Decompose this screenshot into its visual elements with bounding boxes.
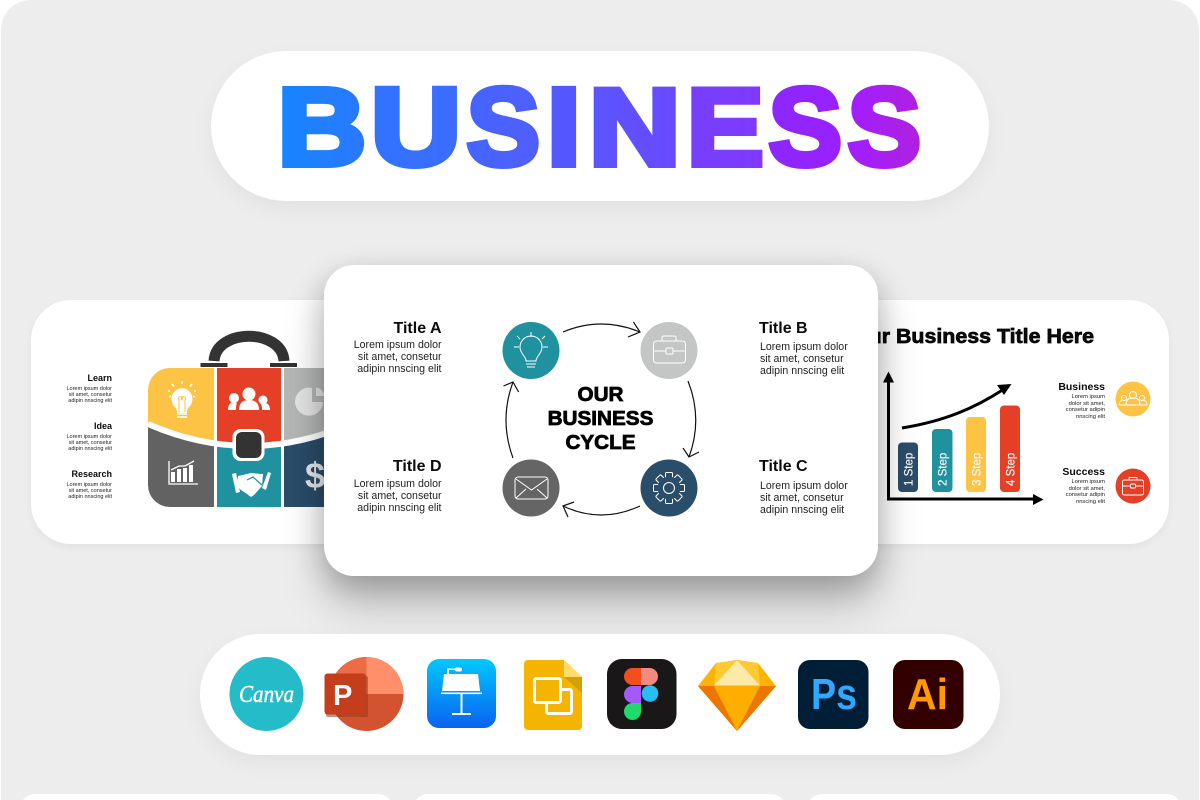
text: Success: dolor sit amet, bbox=[1069, 486, 1105, 492]
bottom row: partially visible cards bbox=[23, 794, 1179, 800]
text: Success bbox=[1062, 466, 1105, 505]
text: Title B: Title B bbox=[759, 320, 808, 337]
text: Success: nnscing elit bbox=[1076, 499, 1105, 505]
icon: lightbulb bbox=[502, 322, 560, 379]
briefcase body bbox=[148, 368, 324, 507]
text: Title D bbox=[354, 458, 442, 514]
panel: briefcase slide bbox=[31, 300, 324, 545]
text: Business: consetur adipin bbox=[1066, 407, 1105, 413]
text: Title C: Title C bbox=[759, 458, 808, 475]
heading: BUSINESS: E bbox=[687, 66, 764, 188]
text: Title B: Lorem ipsum dolor bbox=[760, 341, 848, 353]
panel: growth chart slide bbox=[769, 300, 1169, 544]
center heading: CYCLE bbox=[565, 431, 636, 454]
arrow: right bbox=[683, 381, 699, 457]
bar: 1 Step bbox=[898, 442, 918, 492]
text: Success: Success bbox=[1062, 466, 1105, 478]
text: Success: Lorem ipsum bbox=[1071, 479, 1105, 485]
icon: dollar: $ bbox=[305, 455, 325, 496]
text: Learn bbox=[66, 373, 112, 404]
text: Idea: adipin nnscing elit bbox=[68, 446, 112, 452]
heading: BUSINESS: S bbox=[769, 66, 842, 189]
icon: Illustrator bbox=[893, 660, 964, 729]
icon: gear bbox=[640, 460, 698, 516]
icon: pie chart bbox=[295, 387, 325, 416]
bar: 1 Step: 1 Step bbox=[904, 453, 916, 486]
heading: BUSINESS: S bbox=[467, 66, 540, 189]
text: Title A: adipin nnscing elit bbox=[357, 363, 442, 375]
icon: Photoshop bbox=[798, 660, 868, 729]
text: Business: nnscing elit bbox=[1076, 414, 1105, 420]
text: Title D: adipin nnscing elit bbox=[357, 502, 442, 514]
icon: PowerPoint: P bbox=[333, 680, 352, 712]
text: Title A bbox=[354, 320, 442, 375]
icon: Keynote bbox=[427, 659, 496, 728]
icon: handshake bbox=[232, 472, 271, 497]
text: Learn: sit amet, consetur bbox=[69, 392, 112, 398]
bar: 2 Step bbox=[932, 429, 952, 492]
icon: Illustrator: Ai bbox=[907, 670, 948, 719]
text: Research: adipin nnscing elit bbox=[68, 494, 112, 500]
icon: people circle bbox=[1116, 382, 1150, 416]
text: Research: Research bbox=[71, 469, 112, 479]
text: Title D: sit amet, consetur bbox=[358, 490, 442, 502]
arrow: left bbox=[504, 382, 519, 458]
text: Idea: Lorem ipsum dolor bbox=[66, 434, 112, 440]
briefcase handle bbox=[200, 336, 297, 367]
icon: lightbulb bbox=[168, 381, 196, 417]
text: Learn: adipin nnscing elit bbox=[68, 398, 112, 404]
text: Success: consetur adipin bbox=[1066, 492, 1105, 498]
panel: business cycle slide bbox=[324, 265, 878, 576]
bar: 2 Step: 2 Step bbox=[938, 453, 950, 486]
center heading bbox=[548, 383, 653, 454]
text: Research: sit amet, consetur bbox=[69, 488, 112, 494]
icon: briefcase bbox=[640, 322, 698, 379]
text: Title B: sit amet, consetur bbox=[760, 353, 844, 365]
text: Research: Lorem ipsum dolor bbox=[66, 482, 112, 488]
title pill bbox=[211, 51, 989, 201]
panel: app logos pill bbox=[200, 634, 1000, 755]
heading: BUSINESS: B bbox=[277, 65, 366, 189]
icon: PowerPoint bbox=[324, 657, 404, 731]
slide title: Our Business Title Here bbox=[852, 326, 1094, 348]
icon: bar chart bbox=[169, 461, 198, 484]
text: Business: dolor sit amet, bbox=[1069, 401, 1105, 407]
icon: Canva bbox=[230, 657, 304, 731]
text: Title A: Title A bbox=[393, 320, 442, 337]
icon: envelope bbox=[502, 460, 560, 516]
arrow: top bbox=[563, 322, 640, 337]
app logos row bbox=[230, 657, 964, 731]
chart axes bbox=[883, 372, 1044, 505]
icon: Figma bbox=[607, 659, 676, 729]
bar: 3 Step bbox=[966, 417, 986, 492]
growth arrow bbox=[902, 384, 1012, 428]
briefcase clasp bbox=[232, 429, 264, 461]
text: Title A: sit amet, consetur bbox=[358, 351, 442, 363]
icon: Google Slides bbox=[524, 660, 582, 730]
icon: Sketch bbox=[698, 660, 776, 731]
bar: 4 Step: 4 Step bbox=[1006, 453, 1018, 486]
icon: briefcase circle bbox=[1116, 468, 1150, 504]
text: Title D: Title D bbox=[393, 458, 442, 475]
heading: BUSINESS: N bbox=[589, 66, 681, 189]
bar: 4 Step bbox=[1000, 406, 1020, 492]
center heading: BUSINESS bbox=[548, 407, 653, 430]
heading: BUSINESS: I bbox=[547, 65, 581, 189]
text: Title C: Lorem ipsum dolor bbox=[760, 480, 848, 492]
text: Title D: Lorem ipsum dolor bbox=[354, 478, 442, 490]
text: Title A: Lorem ipsum dolor bbox=[354, 339, 442, 351]
bar: 3 Step: 3 Step bbox=[972, 453, 984, 486]
icon: people bbox=[228, 388, 270, 410]
heading: BUSINESS: S bbox=[848, 66, 921, 189]
text: Business bbox=[1058, 381, 1105, 420]
text: Learn: Learn bbox=[87, 373, 112, 383]
text: Title B bbox=[759, 320, 848, 377]
heading: BUSINESS: U bbox=[371, 65, 461, 188]
text: Title C: adipin nnscing elit bbox=[760, 504, 844, 516]
text: Business: Business bbox=[1058, 381, 1105, 393]
text: Idea: Idea bbox=[94, 421, 113, 431]
text: Title B: adipin nnscing elit bbox=[760, 365, 844, 377]
text: Research bbox=[66, 469, 112, 500]
text: Idea bbox=[66, 421, 113, 452]
text: Title C bbox=[759, 458, 848, 516]
text: Learn: Lorem ipsum dolor bbox=[66, 386, 112, 392]
icon: Photoshop: Ps bbox=[811, 670, 857, 719]
heading: BUSINESS bbox=[277, 65, 921, 189]
center heading: OUR bbox=[578, 383, 624, 406]
text: Idea: sit amet, consetur bbox=[69, 440, 112, 446]
text: Title C: sit amet, consetur bbox=[760, 492, 844, 504]
text: Business: Lorem ipsum bbox=[1071, 394, 1105, 400]
icon: Canva: Canva bbox=[239, 682, 294, 708]
arrow: bottom bbox=[563, 502, 640, 517]
